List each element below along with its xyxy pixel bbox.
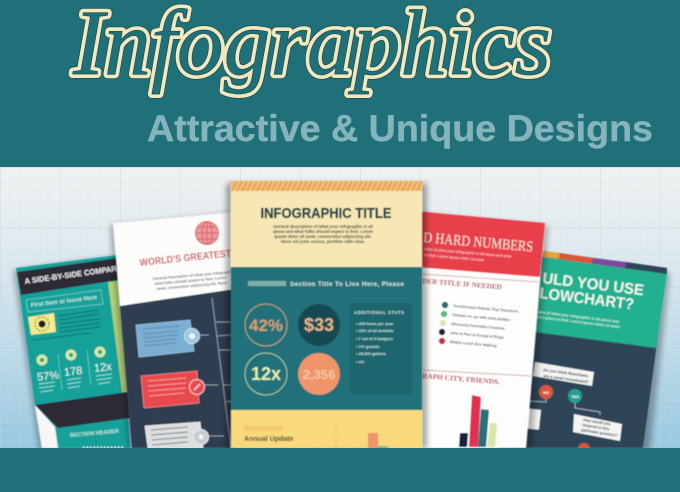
heading: A SIDE-BY-SIDE COMPAR [24,264,118,286]
legend list: Transformers Robots That Transform [453,304,519,314]
flowchart heading: ULD YOU USE [542,270,645,299]
stat: 12x: 12x [93,361,113,375]
additional stats box: • 25,000 gallons [356,351,387,356]
stat circle $33: $33 [304,315,334,335]
question box 1: Do you think flowcharts [543,367,589,378]
callout: grey [145,422,224,448]
additional stats box: ADDITIONAL STATS [354,310,404,315]
green header band [535,257,667,348]
colour strip [542,251,667,274]
flowchart description: nd a place to find, Lorem ipsum dolor sit amet [537,315,621,329]
additional stats box: • 7 out of 9 badgers [356,336,394,341]
additional stats box: • 365 items per year [356,321,394,326]
item label box [26,290,103,312]
section title: DER TITLE IF NEEDED [422,277,502,291]
callout: blue [136,320,209,357]
white fold [35,405,58,448]
legend list: Mobile Lunch Box Walking [450,340,497,348]
timeline lines [212,298,231,448]
stat: 57% [36,354,60,392]
flowchart description: ales of what your infographic is all about and [538,310,620,324]
stat circle 12x [245,353,287,395]
dark fold band [35,392,130,428]
stat: 178: 178 [63,365,83,379]
header band [0,0,680,167]
white header [113,212,235,306]
annual update label [244,426,293,443]
question box 2 [573,414,622,441]
legend list [439,302,519,348]
additional stats box: • etc [356,359,365,364]
central description: about and what folks should expect to find. Lorem [273,229,373,234]
yes node: YES [571,394,579,399]
central title: INFOGRAPHIC TITLE [260,206,392,222]
stat circle 2,356: 2,356 [303,367,335,382]
question box 2: How would you [583,418,612,426]
additional stats box: • Y/Y growth [356,344,380,349]
panel: world's greatest poster [110,212,238,450]
yellow section [231,410,422,448]
heading: D HARD NUMBERS [423,230,534,256]
additional stats box [350,303,412,394]
stat circle 42%: 42% [249,316,283,335]
bar chart [459,395,497,447]
panel: central infographic poster [226,181,427,448]
description text [33,310,101,340]
central description [273,224,373,244]
icon: globe [196,222,218,244]
item label box: First Item or Issue Here [31,295,98,309]
stat: 178 [63,350,83,388]
callout: red [141,371,218,408]
stat: 12x [93,346,113,384]
stat dividers [58,350,91,390]
yes node [568,389,582,403]
orange stripe [231,181,422,191]
description: what folks should expect to find. Lorem [154,276,227,286]
heading: WORLD'S GREATEST [139,248,232,269]
stat circle 12x: 12x [251,364,281,384]
subtitle: Attractive & Unique Designs [147,108,653,149]
graph section title: RAPH CITY, FRIENDS. [422,372,500,386]
legend list: John & Paul & George & Ringo [450,331,505,340]
footer band [0,448,680,492]
legend list: Chicken on rye with extra pickles [452,313,510,322]
red header band [415,211,545,277]
section title: Section Title To Live Here, Please [290,281,404,288]
legend list: Obviously Favorable Croutons [451,322,505,331]
description: ndes of what your infographic is all about and what [424,247,512,259]
panel: hard numbers poster [400,211,548,448]
central description: ipsum dolor sit amet, consectetur adipiscing elit. [274,234,372,239]
description: to find. Lorem ipsum dolor sit amet [424,253,485,262]
description: amet, consectetur adipiscing elit. Nunc [157,281,227,291]
tick row [83,446,124,450]
central description: General description of what your infographic is all [273,224,373,229]
divider line [422,274,539,282]
divider line [422,370,531,376]
no node [539,385,553,399]
flowchart heading line 2: LOWCHART? [539,285,635,314]
question box 2: particular question? [581,428,618,438]
node at base [578,443,590,455]
annual update label: Annual Update [244,436,293,443]
stat: 57%: 57% [37,369,60,384]
question box 1: are a smart investment? [543,373,590,384]
stat circle $33 [298,304,340,346]
dark heading band [17,258,118,295]
description [153,270,238,291]
section header label: SECTION HEADER [70,429,119,439]
green side strip [108,281,130,392]
stat circle 2,356 [298,353,340,395]
left answer box [524,408,541,430]
icon: sun [28,313,56,335]
question box 2: respond to this [582,423,610,431]
panel: side-by-side comparison poster [13,255,130,450]
flow connectors [528,399,600,415]
mini bar chart [336,426,388,448]
central description: Nunc vel justo cursus, porttitor nibh vitae. [281,239,365,244]
stat circle 42% [245,304,287,346]
no node: NO [543,390,549,395]
panel: flowchart poster [500,251,670,455]
background panel [0,167,680,448]
additional stats box: • 15% of all dentists [356,328,394,333]
question box 1 [533,362,594,386]
description: General description of what your infographic is [153,270,238,281]
teal section [231,267,422,410]
